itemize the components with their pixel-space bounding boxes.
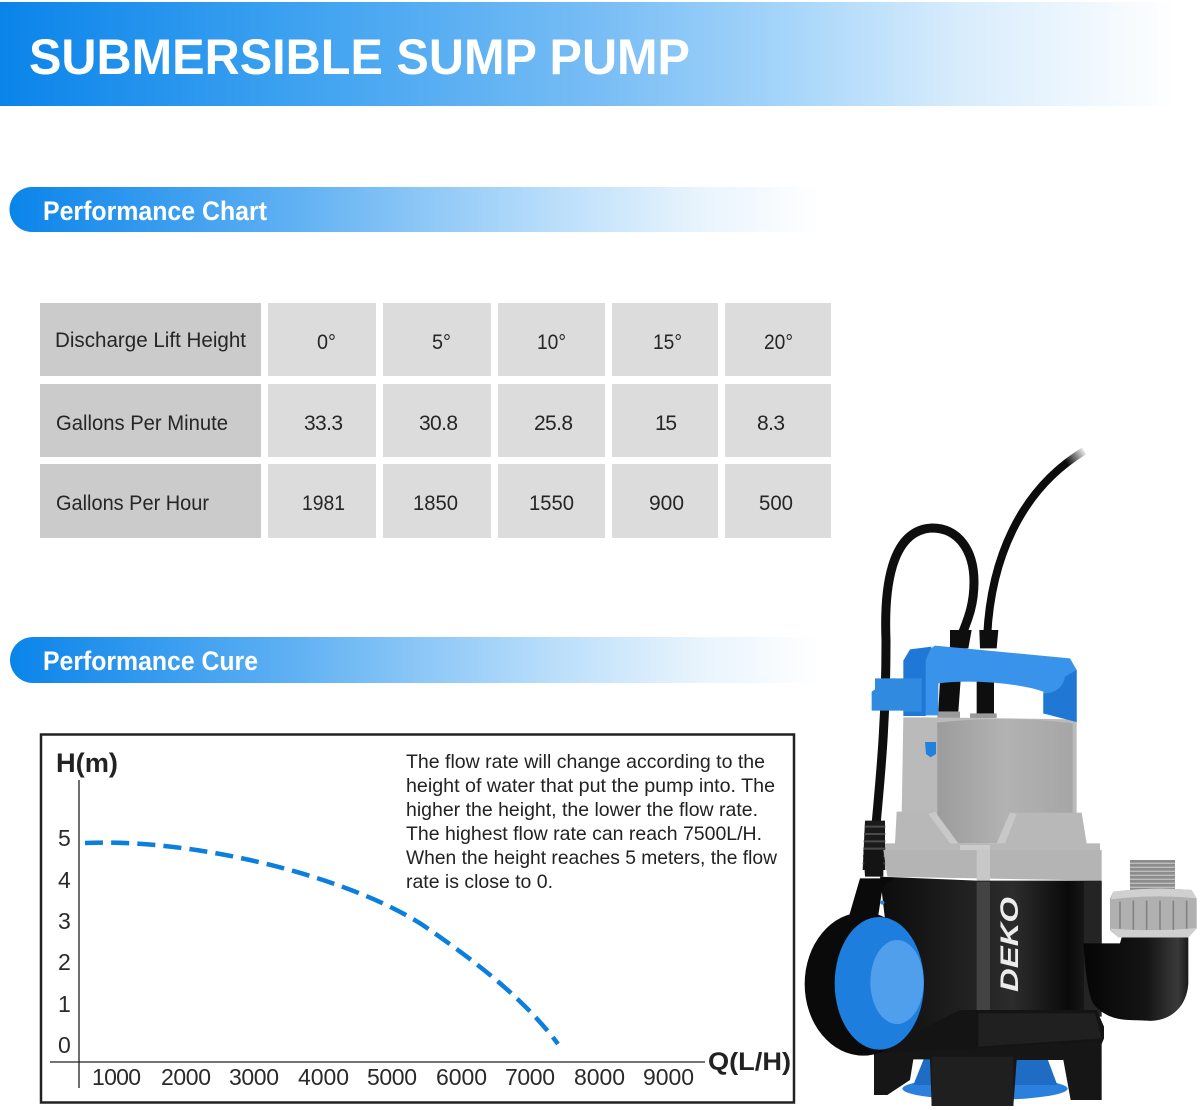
y axis title: H(m) — [56, 748, 118, 778]
performance table: Gallons Per Minute — [56, 412, 228, 435]
section heading: performance chart — [10, 187, 820, 232]
explanation text: The flow rate will change according to the — [406, 751, 765, 773]
x axis labels: 1000 — [92, 1064, 141, 1090]
performance table — [40, 303, 831, 538]
shoulder casting — [883, 812, 1100, 870]
cable clip — [872, 678, 922, 712]
cable washers — [937, 712, 997, 718]
power cable — [987, 451, 1084, 640]
performance table: 25.8 — [534, 412, 573, 435]
x axis title: Q(L/H) — [708, 1048, 791, 1076]
performance table: 15° — [653, 331, 682, 354]
brand mark: DEKO — [996, 896, 1024, 992]
performance table: 1850 — [413, 492, 458, 515]
axes — [50, 780, 705, 1088]
performance table: 33.3 — [304, 412, 343, 435]
header banner — [0, 2, 1200, 106]
y axis labels: 3 — [58, 908, 71, 934]
title: SUBMERSIBLE SUMP PUMP — [29, 29, 690, 85]
performance table: 30.8 — [419, 412, 458, 435]
performance table: 1550 — [529, 492, 574, 515]
pump photo illustration — [805, 451, 1197, 1106]
explanation text: When the height reaches 5 meters, the flow — [406, 847, 778, 869]
base — [877, 1010, 1104, 1054]
feet — [874, 1042, 1102, 1106]
motor housing — [902, 717, 1077, 815]
spring strain relief — [863, 821, 885, 870]
performance table: 1981 — [302, 492, 345, 515]
performance table: 900 — [649, 492, 684, 515]
section heading: performance chart: Performance Chart — [43, 196, 267, 226]
x axis labels: 4000 — [298, 1064, 349, 1090]
float level indicator — [925, 742, 936, 757]
x axis labels: 2000 — [161, 1064, 211, 1090]
performance table: 0° — [317, 331, 336, 354]
performance table: 10° — [537, 331, 566, 354]
union collar — [1110, 889, 1197, 937]
blue base disc — [902, 1077, 1068, 1100]
explanation text: height of water that put the pump into. The — [406, 775, 775, 797]
performance curve chart — [41, 734, 794, 1102]
x axis labels: 3000 — [229, 1064, 279, 1090]
explanation text: The highest flow rate can reach 7500L/H. — [406, 823, 762, 845]
cables through handle — [938, 630, 998, 714]
section heading: performance curve — [10, 637, 820, 683]
y axis labels: 4 — [58, 867, 71, 893]
dashed flow curve — [85, 843, 558, 1044]
performance table: 8.3 — [757, 412, 785, 435]
x axis labels: 7000 — [505, 1064, 555, 1090]
performance table: Gallons Per Hour — [56, 492, 209, 515]
x axis labels: 8000 — [574, 1064, 625, 1090]
x axis labels: 9000 — [643, 1064, 694, 1090]
lower grey band — [883, 850, 1102, 881]
outlet elbow — [1083, 937, 1188, 1021]
explanation text: higher the height, the lower the flow rate. — [406, 799, 758, 821]
explanation text — [406, 751, 778, 893]
outlet thread — [1130, 860, 1175, 890]
x axis labels: 5000 — [367, 1064, 417, 1090]
y axis labels: 2 — [58, 949, 71, 975]
y axis labels: 0 — [58, 1032, 71, 1058]
y axis labels: 1 — [58, 991, 71, 1017]
performance table: 5° — [432, 331, 451, 354]
float cable loop — [876, 528, 974, 825]
performance table: 15 — [655, 412, 677, 435]
x axis labels — [92, 1064, 694, 1090]
explanation text: rate is close to 0. — [406, 871, 553, 893]
black body — [880, 877, 1102, 1047]
performance table: Discharge Lift Height — [55, 329, 246, 352]
blue handle — [925, 646, 1077, 722]
performance table: 500 — [759, 492, 793, 515]
section heading: performance curve: Performance Cure — [43, 646, 258, 676]
float bracket — [849, 878, 893, 915]
y axis labels — [58, 825, 71, 1058]
y axis labels: 5 — [58, 825, 71, 851]
performance table: 20° — [764, 331, 793, 354]
float ball — [805, 912, 922, 1056]
x axis labels: 6000 — [436, 1064, 487, 1090]
